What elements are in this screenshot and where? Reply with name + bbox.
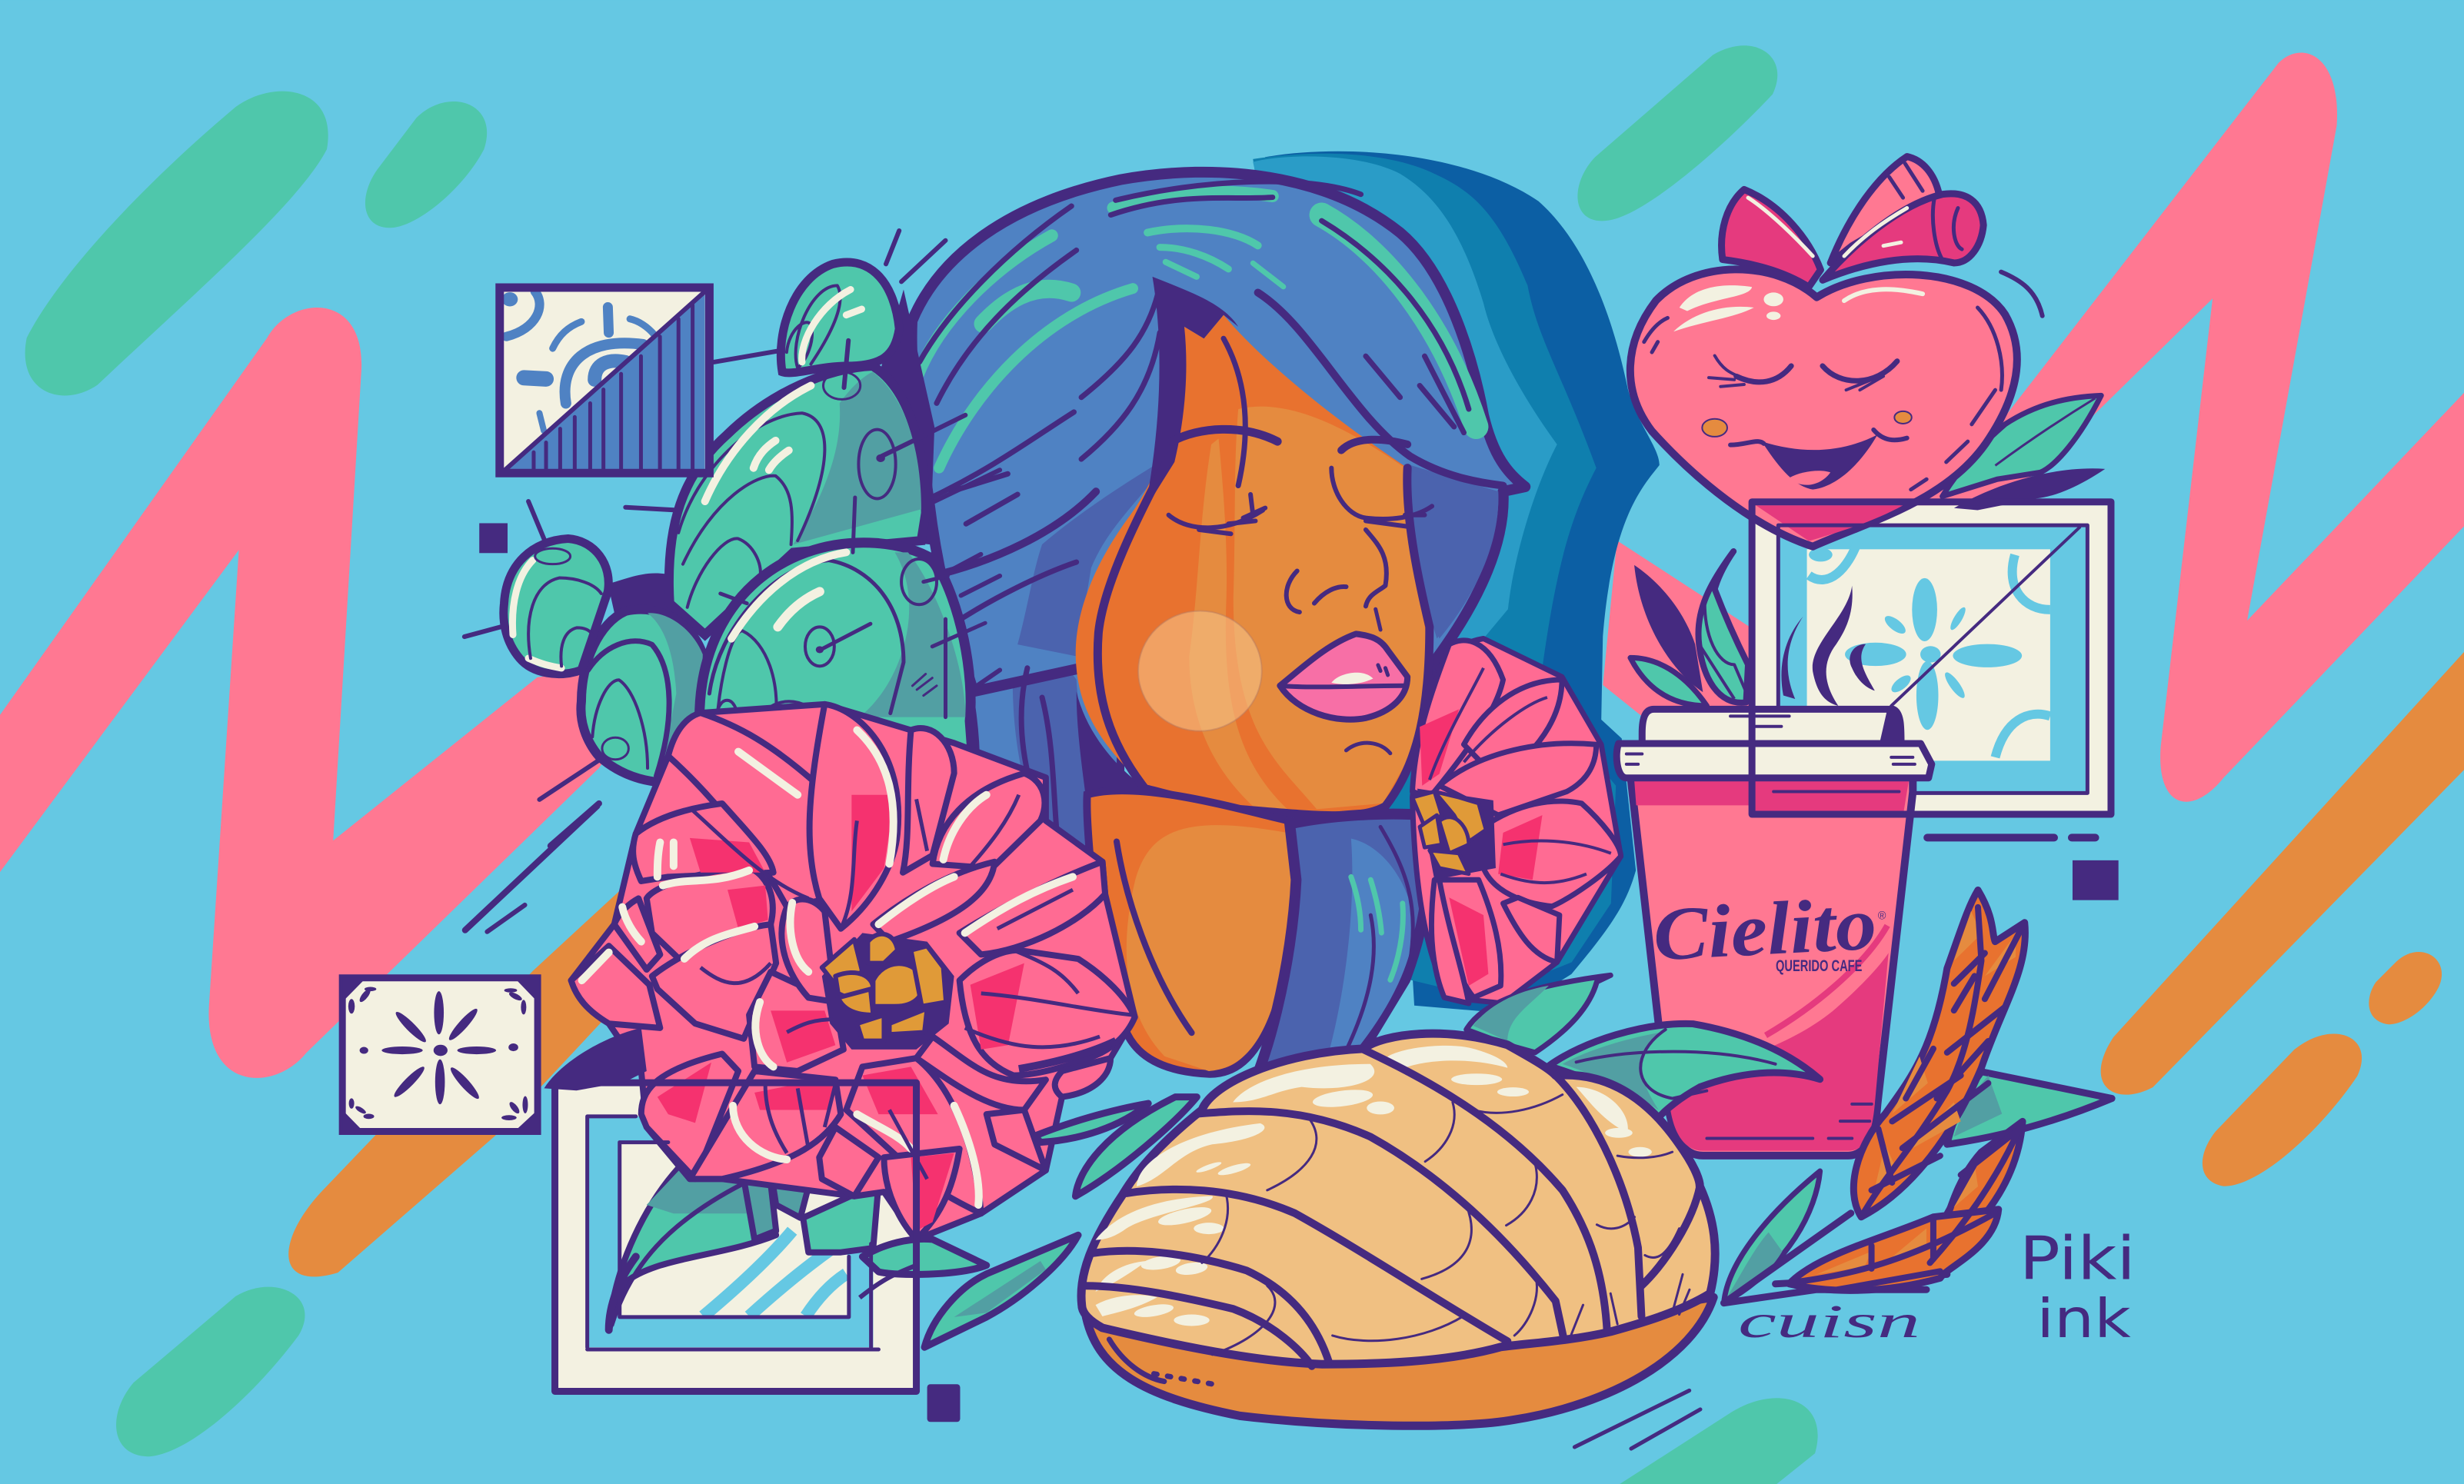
pink zigzag left <box>0 308 676 1078</box>
right flower <box>1413 638 1621 1003</box>
blue stripes in frame <box>703 1231 846 1316</box>
top pad <box>781 262 899 373</box>
coffee cup <box>1617 709 1932 1156</box>
orange strokes <box>288 652 2464 1276</box>
right frame outlines <box>1752 502 2119 900</box>
woman portrait <box>912 172 1525 1115</box>
artist mark: Piki ink <box>2019 1224 2136 1350</box>
stems <box>1724 1213 1947 1303</box>
steam <box>1781 586 1875 706</box>
closed eyes <box>1169 468 1432 534</box>
crust highlights <box>1096 1046 1652 1326</box>
wheat light patches <box>1816 911 2016 1274</box>
leaf far right <box>1947 1072 2112 1144</box>
small square marker left <box>479 523 508 553</box>
tile: blue flower frame right <box>1753 505 2111 812</box>
lips <box>1280 634 1407 720</box>
right flower base <box>1413 638 1621 1003</box>
leaves beside bread and cup <box>1467 975 2112 1303</box>
floor leaves left <box>860 1097 1197 1347</box>
pink zigzag right <box>1603 52 2464 802</box>
tile: half sun with stripes <box>500 288 709 473</box>
crust segments <box>1085 1050 1700 1366</box>
ear third <box>1789 1209 1999 1290</box>
neck <box>1087 790 1294 1074</box>
ear main <box>1853 890 2025 1217</box>
Piki: Piki <box>2019 1224 2136 1293</box>
lower left pad <box>581 610 705 783</box>
leaf below right of bread <box>1724 1171 1820 1303</box>
bow <box>1722 189 1820 287</box>
blue flower motif <box>1845 578 2022 730</box>
lid <box>1642 709 1901 744</box>
dark wedge under fringe <box>1145 277 1238 509</box>
hair highlights <box>917 192 1476 468</box>
stripes <box>504 290 708 471</box>
small left pad <box>504 539 608 674</box>
center dark <box>822 933 954 1050</box>
cup branding <box>1651 882 1886 977</box>
ink: ink <box>2036 1289 2132 1350</box>
bread base <box>1085 1297 1713 1426</box>
dark fill between pads <box>608 574 688 639</box>
leaf right of bread <box>1549 1023 1820 1117</box>
petal veins <box>690 795 1132 1179</box>
signature: cuisn <box>1738 1296 1920 1348</box>
bottom hair <box>1238 814 1428 1115</box>
back petals <box>668 713 830 907</box>
ear second <box>1926 1121 2023 1266</box>
right flower center <box>1413 791 1486 874</box>
cactus <box>464 231 1000 846</box>
hair shadow waves <box>1253 151 1660 1013</box>
wheat grain lines <box>1796 907 2023 1289</box>
cheek freckles <box>1702 419 1727 437</box>
nose <box>1287 530 1387 612</box>
leaves behind cup <box>1630 551 1748 706</box>
eyes <box>1709 356 1897 390</box>
smile <box>1762 434 1877 490</box>
left flower base <box>571 704 1135 1239</box>
sun motif <box>502 291 654 431</box>
spines <box>464 231 1000 846</box>
crust <box>1081 1033 1715 1364</box>
bottom-left frame outlines <box>544 1028 917 1391</box>
cup lower shade <box>1667 953 1889 1151</box>
dark leaf at frame corner <box>544 1028 647 1090</box>
hair strands <box>920 181 1503 874</box>
leaves beside heart <box>1943 395 2101 497</box>
green brush strokes <box>25 45 1818 1484</box>
hair mass <box>912 172 1525 727</box>
dashes under frame <box>1927 834 2096 841</box>
left flower center <box>822 934 946 1041</box>
eyebrows <box>1172 429 1407 451</box>
small square marker right <box>2073 860 2119 900</box>
face shape <box>1076 315 1427 815</box>
cheek blush <box>1138 611 1262 731</box>
bottom-left frame fills <box>556 1083 914 1390</box>
cup body <box>1630 774 1913 1156</box>
wheat <box>1724 890 2025 1303</box>
tile: flower <box>342 978 538 1132</box>
petal highlights <box>582 730 1073 1205</box>
logo: Cielito: Cielito <box>1651 882 1879 977</box>
crust fine lines <box>1202 1095 1690 1355</box>
leaf upper <box>1467 975 1610 1053</box>
heart character <box>1630 157 2105 547</box>
leaf behind flower <box>609 1162 776 1330</box>
large pad <box>669 366 926 635</box>
lower right pad <box>700 543 974 780</box>
heart tip inside frame <box>1756 505 1903 541</box>
green sepals <box>771 1166 814 1218</box>
lower left hair <box>939 574 1120 885</box>
registered mark: ® <box>1878 910 1886 922</box>
motion strokes <box>465 806 1700 1449</box>
petal shading <box>658 795 1024 1231</box>
tagline: QUERIDO CAFE <box>1776 957 1862 975</box>
heart body <box>1630 269 2017 547</box>
concha bread <box>1081 1033 1715 1426</box>
left flower <box>571 704 1135 1330</box>
shadow under jaw <box>1077 691 1150 800</box>
heart highlights <box>1673 285 1754 331</box>
small square marker bottom <box>927 1384 960 1422</box>
